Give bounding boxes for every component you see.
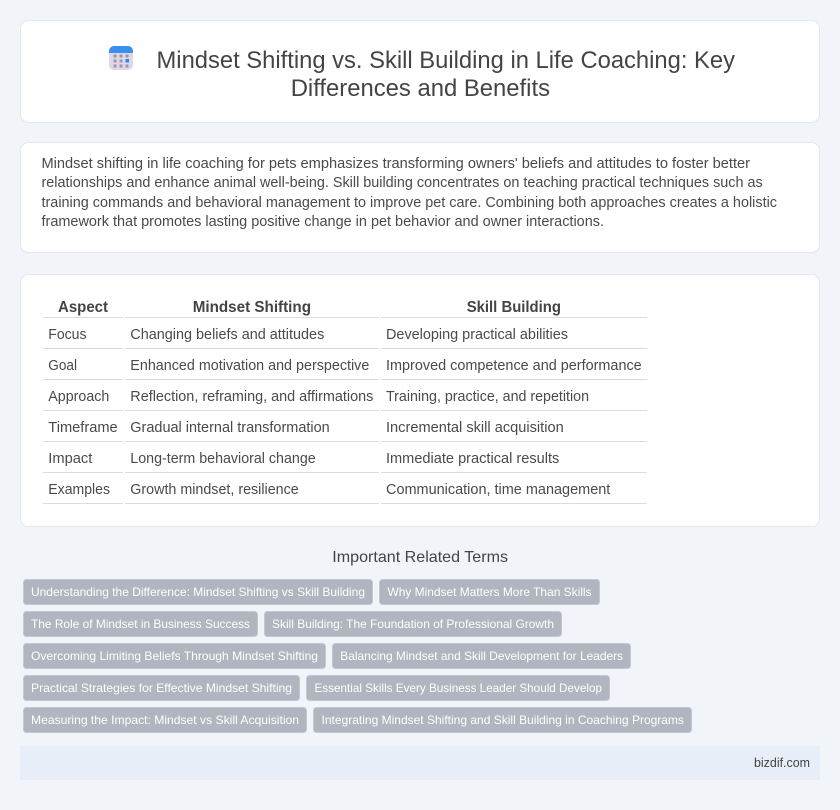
- table row: focus: Developing practical abilities: [386, 327, 568, 343]
- table row: timeframe: Gradual internal transformation: [130, 420, 330, 436]
- table row: timeframe: Incremental skill acquisition: [386, 420, 564, 436]
- table row: examples: Communication, time management: [386, 482, 610, 498]
- title: [156, 47, 735, 102]
- tag: The Role of Mindset in Business Success: [31, 617, 250, 631]
- tag: [24, 612, 258, 636]
- table header: [43, 299, 647, 318]
- tag: Overcoming Limiting Beliefs Through Mindset Shifting: [31, 649, 318, 663]
- tag: Practical Strategies for Effective Mindset Shifting: [31, 681, 292, 695]
- table row: focus: Changing beliefs and attitudes: [130, 327, 324, 343]
- text block: introduction paragraph: framework that promotes lasting positive change in pet behavior and owner interactions.: [42, 214, 604, 230]
- panel: title card: [20, 20, 820, 122]
- tag: [24, 676, 300, 700]
- table row: approach: Reflection, reframing, and affirmations: [130, 389, 373, 405]
- tag group: related terms: [24, 580, 692, 732]
- tag: [24, 708, 306, 732]
- table row: timeframe: Timeframe: [48, 420, 118, 436]
- table row: examples: [43, 482, 647, 504]
- tag: [24, 644, 326, 668]
- table header: Mindset Shifting: [193, 299, 311, 316]
- tag: Skill Building: The Foundation of Professional Growth: [272, 617, 554, 631]
- tag: [314, 708, 692, 732]
- tag: Essential Skills Every Business Leader Should Develop: [314, 681, 602, 695]
- tag: Balancing Mindset and Skill Development for Leaders: [340, 649, 623, 663]
- table row: timeframe: [43, 420, 647, 442]
- tag: Integrating Mindset Shifting and Skill Building in Coaching Programs: [322, 713, 684, 727]
- tag: Why Mindset Matters More Than Skills: [388, 585, 592, 599]
- table header: Aspect: [58, 299, 109, 316]
- title: Differences and Benefits: [291, 75, 550, 102]
- title: Mindset Shifting vs. Skill Building in Life Coaching: Key: [156, 47, 735, 74]
- table row: impact: [43, 451, 647, 473]
- table row: focus: [43, 327, 647, 349]
- text block: introduction paragraph: [42, 156, 777, 230]
- table row: impact: Impact: [48, 451, 92, 467]
- table row: impact: Immediate practical results: [386, 451, 559, 467]
- panel: introduction: [20, 142, 820, 252]
- panel: comparison table: [20, 274, 820, 526]
- heading: important related terms: Important Related Terms: [332, 549, 508, 566]
- table row: goal: Goal: [48, 358, 77, 374]
- tag: [380, 580, 600, 604]
- footer: bizdif.com: [754, 755, 810, 770]
- table row: approach: Training, practice, and repetition: [386, 389, 589, 405]
- text block: introduction paragraph: relationships and enhance animal well-being. Skill building concentrates on teaching practical techniques such as: [42, 175, 763, 191]
- table row: focus: Focus: [48, 327, 86, 343]
- tag: [24, 580, 372, 604]
- table row: examples: Examples: [48, 482, 110, 498]
- table row: approach: Approach: [48, 389, 109, 405]
- table row: goal: Enhanced motivation and perspective: [130, 358, 369, 374]
- footer: [20, 746, 820, 780]
- text block: introduction paragraph: training commands and behavioral management to improve pet care. Combining both approaches creates a holistic: [42, 195, 777, 211]
- table row: impact: Long-term behavioral change: [130, 451, 316, 467]
- tag: [332, 644, 630, 668]
- table header: Skill Building: [467, 299, 561, 316]
- table row: examples: Growth mindset, resilience: [130, 482, 299, 498]
- table row: goal: [43, 358, 647, 380]
- icon: calendar: [109, 46, 133, 70]
- text block: introduction paragraph: Mindset shifting in life coaching for pets emphasizes transforming owners' beliefs and attitudes to foster better: [42, 156, 750, 172]
- tag: [264, 612, 562, 636]
- tag: Measuring the Impact: Mindset vs Skill Acquisition: [31, 713, 299, 727]
- table row: approach: [43, 389, 647, 411]
- table row: goal: Improved competence and performance: [386, 358, 642, 374]
- tag: [306, 676, 610, 700]
- tag: Understanding the Difference: Mindset Shifting vs Skill Building: [31, 585, 365, 599]
